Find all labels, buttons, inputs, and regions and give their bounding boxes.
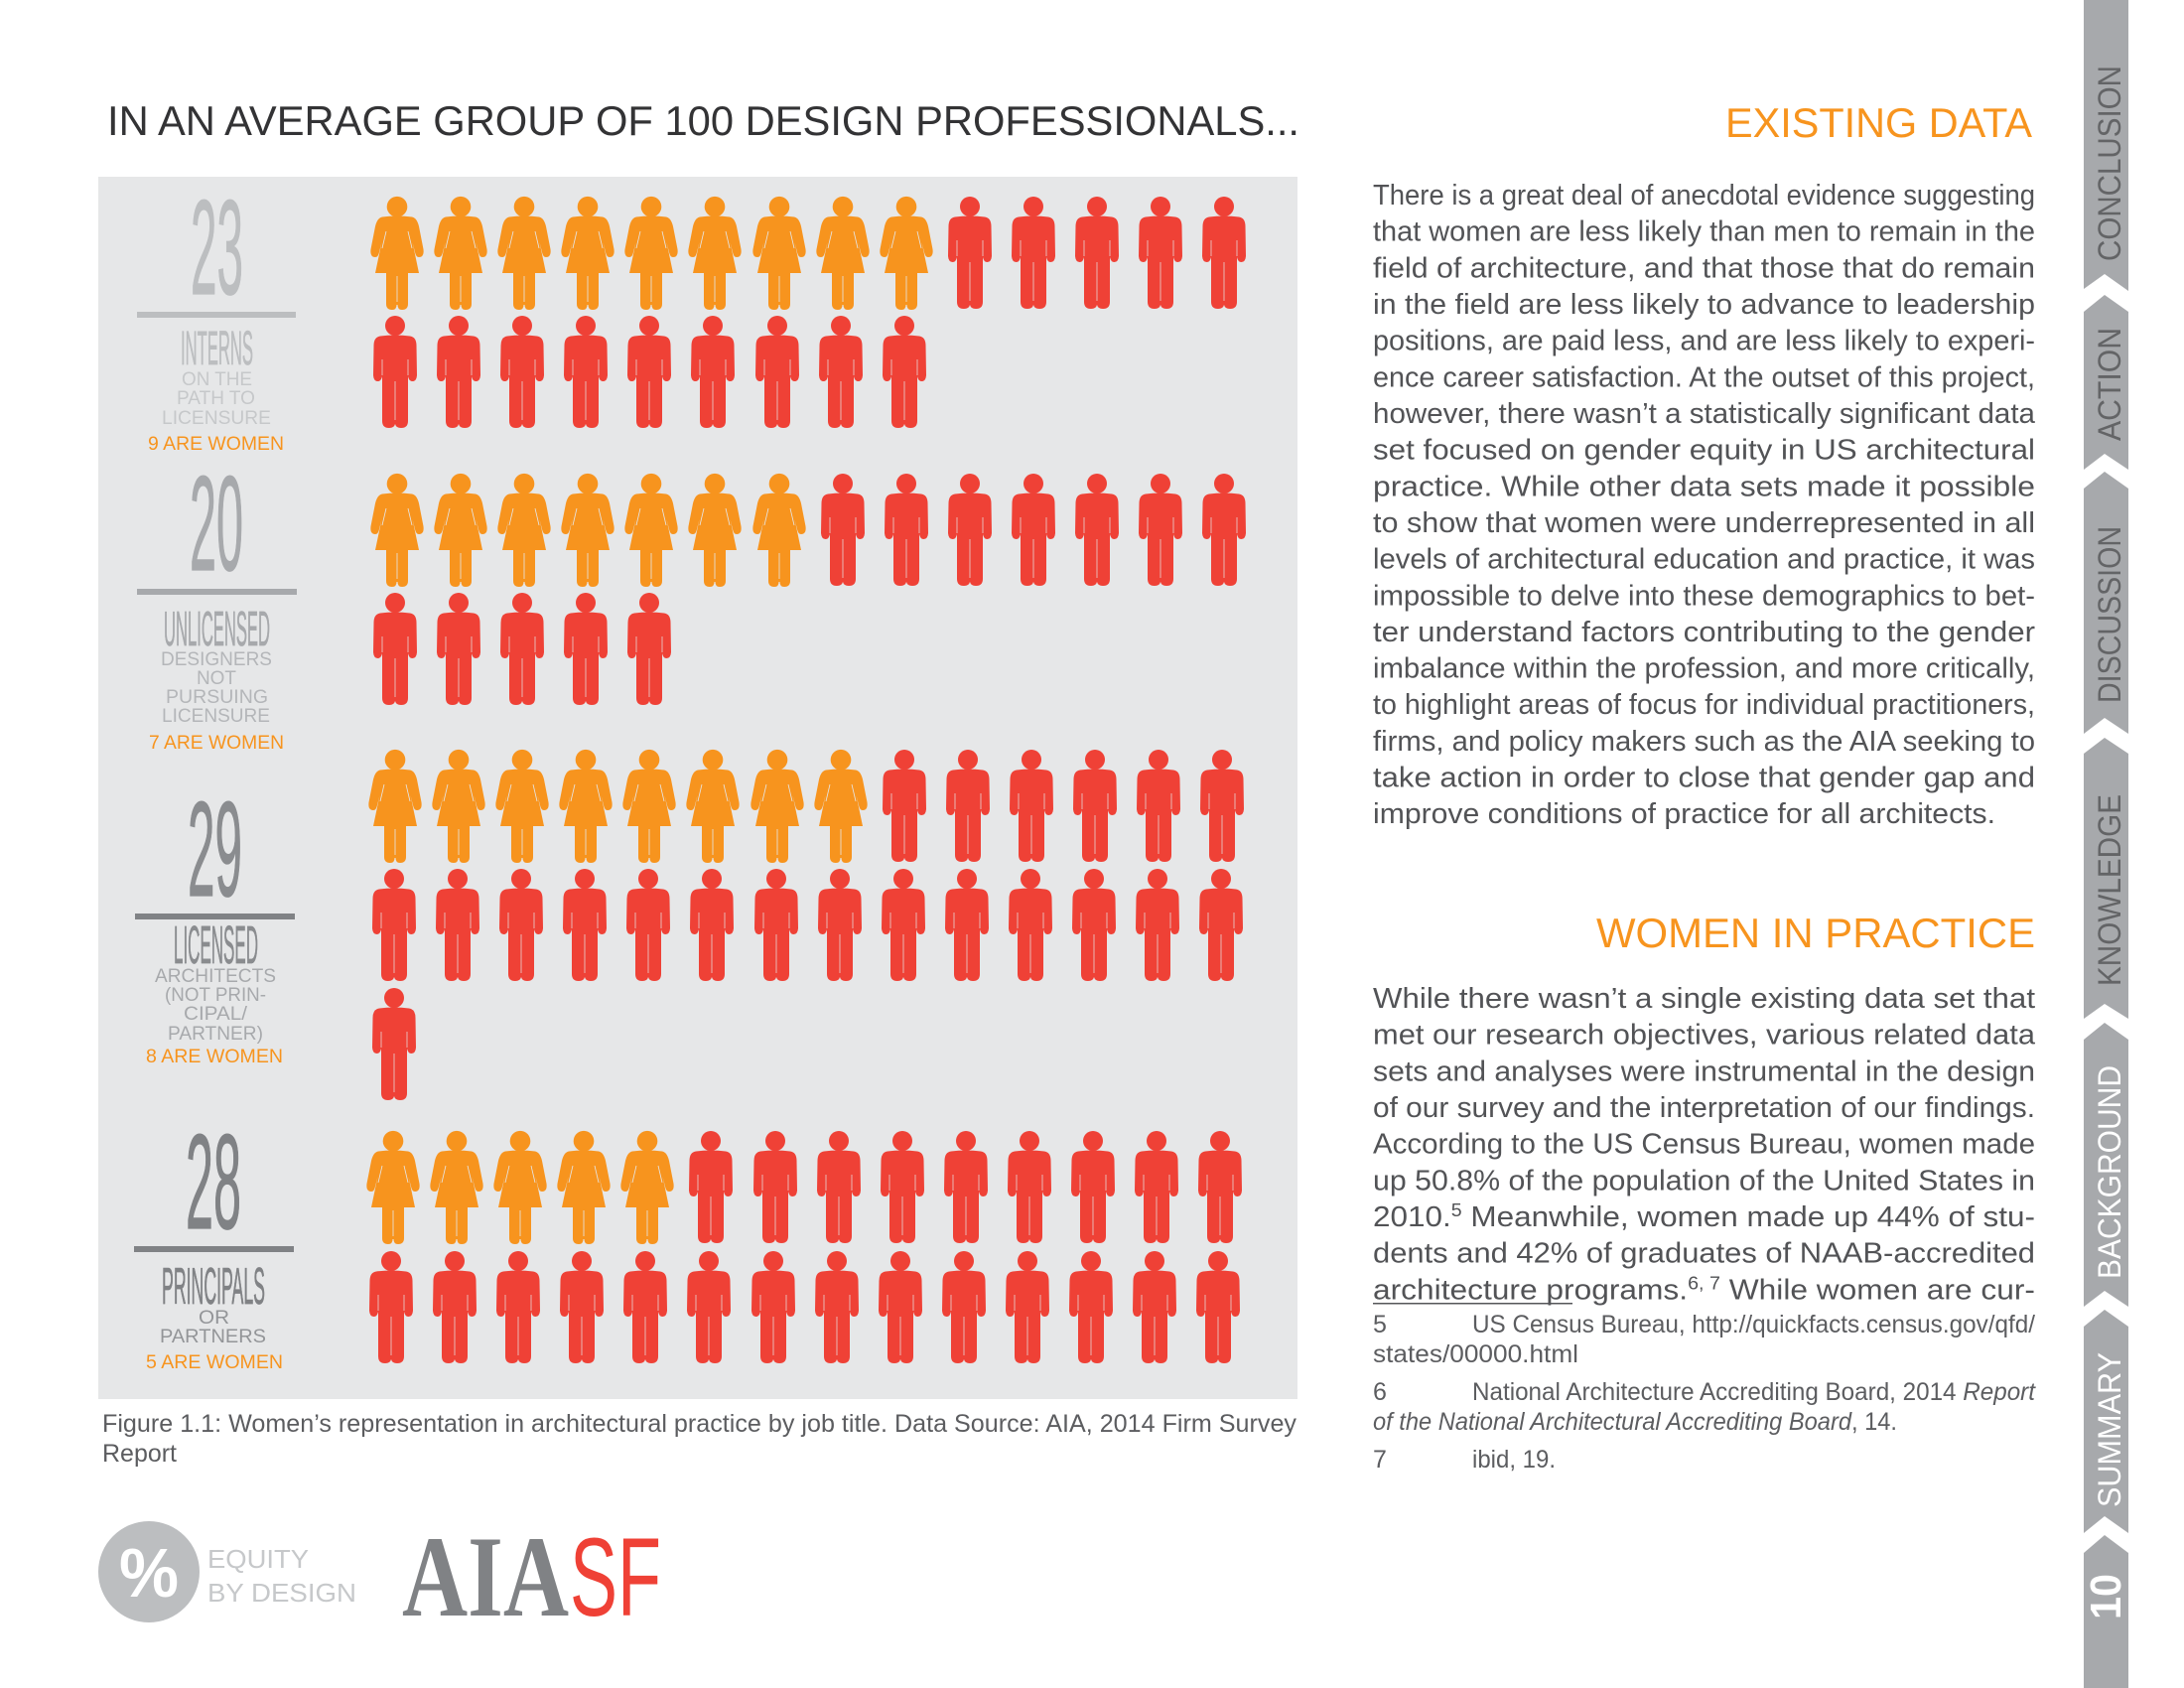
footnotes: states/00000.html [1373,1340,1578,1368]
footnotes: 7 [1373,1446,1387,1474]
footnotes: National Architecture Accrediting Board, 2014 Report [1472,1378,2036,1406]
text block: women in practice: 5 [1451,1200,1462,1220]
footnotes: of the National Architectural Accrediting Board, 14. [1373,1408,1897,1436]
interns label [148,323,284,455]
licensed label: PARTNER) [168,1024,263,1045]
text block: existing data: in the field are less likely to advance to leadership [1373,289,2035,321]
tab: discussion [2084,472,2128,734]
text block: women in practice [1373,983,2036,1306]
unlicensed label: PURSUING [166,687,268,708]
licensed label: (NOT PRIN- [165,985,266,1006]
text block: existing data: There is a great deal of anecdotal evidence suggesting [1373,180,2035,211]
text block: women in practice: 6, 7 [1688,1273,1720,1293]
logo: AIASF: SF [570,1515,661,1639]
text block: existing data: levels of architectural education and practice, it was [1373,544,2035,576]
unlicensed icons row 2 [373,593,671,705]
text block: existing data: however, there wasn’t a statistically significant data [1373,398,2036,430]
principals icons row 2 [369,1251,1240,1363]
unlicensed label: NOT [197,668,236,689]
text block: women in practice: 2010. [1373,1201,1445,1233]
text block: women in practice: According to the US Census Bureau, women made [1373,1129,2035,1161]
group: licensed [135,750,1244,1100]
group: principals: PRINCIPALS [162,1258,265,1316]
tab: background [2084,1023,2128,1307]
tab: knowledge: KNOWLEDGE [2092,794,2127,986]
unlicensed label: 7 ARE WOMEN [149,733,284,754]
footnotes: 5 [1373,1311,1387,1338]
principals label: 5 ARE WOMEN [146,1352,283,1373]
tab: summary: SUMMARY [2092,1352,2127,1507]
page number tab [2082,1535,2130,1688]
panel background [98,177,1297,1399]
licensed label [146,915,283,1067]
tab: summary [2084,1310,2128,1533]
footnote rule [1373,1303,1572,1305]
figure caption: Report [102,1440,177,1468]
figure caption [102,1410,1297,1468]
text block: women in practice: While there wasn’t a single existing data set that [1373,983,2035,1015]
text block: existing data: firms, and policy makers such as the AIA seeking to [1373,726,2035,758]
panel: pictogram chart [98,172,1297,1399]
text block: existing data: ter understand factors contributing to the gender [1373,617,2035,648]
text block: existing data: that women are less likely than men to remain in the [1373,216,2035,248]
licensed label: 8 ARE WOMEN [146,1047,283,1067]
unlicensed label: DESIGNERS [161,649,272,670]
text block: women in practice: sets and analyses were instrumental in the design [1373,1055,2035,1087]
footnotes: US Census Bureau, http://quickfacts.census.gov/qfd/ [1472,1311,2035,1338]
footnotes: 6 [1373,1378,1387,1406]
logo: equity by design: % [119,1534,179,1612]
interns label: PATH TO [177,388,255,409]
tab: discussion: DISCUSSION [2092,526,2127,703]
text block: existing data: practice. While other data sets made it possible [1373,471,2035,502]
logo: equity by design: EQUITY [207,1544,309,1574]
text block: existing data: ence career satisfaction. At the outset of this project, [1373,361,2035,393]
interns label: 9 ARE WOMEN [148,434,284,455]
logo: equity by design [98,1521,356,1622]
text block: existing data: take action in order to close that gender gap and [1373,763,2035,794]
footnotes: ibid, 19. [1472,1446,1556,1474]
interns icons row 2 [373,316,926,428]
text block: existing data: positions, are paid less, and are less likely to experi- [1373,326,2035,357]
group: licensed: LICENSED [174,915,258,975]
group: interns [137,172,1246,455]
text block: existing data: set focused on gender equity in US architectural [1373,435,2035,467]
text block: women in practice: dents and 42% of graduates of NAAB-accredited [1373,1238,2035,1270]
title: IN AN AVERAGE GROUP OF 100 DESIGN PROFESSIONALS... [107,97,1299,144]
licensed rule [135,914,295,919]
group: interns: INTERNS [181,323,253,375]
text block: existing data: impossible to delve into these demographics to bet- [1373,580,2035,612]
tab: action [2084,295,2128,470]
footnotes [1373,1311,2036,1474]
sidebar navigation [2082,0,2130,1688]
licensed label: CIPAL/ [184,1004,248,1025]
figure caption: Figure 1.1: Women’s representation in architectural practice by job title. Data Source: AIA, 2014 Firm Survey [102,1410,1297,1438]
text block: existing data: imbalance within the profession, and more critically, [1373,653,2035,685]
text block: existing data: to show that women were underrepresented in all [1373,507,2035,539]
group: principals: 28 [186,1106,241,1257]
text block: women in practice: met our research objectives, various related data [1373,1020,2036,1052]
page number tab: 10 [2082,1574,2130,1619]
text block: existing data: to highlight areas of focus for individual practitioners, [1373,689,2035,721]
group: principals [134,1106,1242,1373]
heading: women in practice: WOMEN IN PRACTICE [1596,910,2035,956]
interns label: ON THE [182,369,252,390]
text block: women in practice: up 50.8% of the population of the United States in [1373,1165,2035,1196]
principals label: OR [199,1308,229,1329]
text block: women in practice: While women are cur- [1720,1274,2035,1306]
group: unlicensed: UNLICENSED [164,603,270,656]
interns label: LICENSURE [162,408,271,429]
group: interns: 23 [191,172,243,323]
text block: existing data [1373,180,2036,830]
text block: women in practice: Meanwhile, women made up 44% of stu- [1462,1201,2035,1233]
tab: conclusion: CONCLUSION [2092,66,2127,261]
heading: existing data: EXISTING DATA [1725,99,2032,146]
licensed icons row 3 [372,988,416,1100]
tab: background: BACKGROUND [2092,1065,2127,1279]
interns rule [137,312,296,318]
tab: knowledge [2084,738,2128,1019]
principals rule [134,1246,294,1252]
interns icons row 1 [370,197,1246,310]
principals label: PARTNERS [160,1327,266,1347]
tab: conclusion [2084,0,2128,291]
logo: AIASF: AIA [402,1513,569,1641]
unlicensed label: LICENSURE [162,706,270,727]
principals label [146,1258,283,1373]
group: unlicensed: 20 [190,448,243,599]
tab: action: ACTION [2092,328,2127,441]
text block: women in practice: of our survey and the interpretation of our findings. [1373,1092,2035,1124]
unlicensed label [149,603,284,754]
unlicensed rule [137,589,297,595]
unlicensed icons row 1 [370,474,1246,587]
licensed icons row 2 [372,869,1243,981]
logo: equity by design: BY DESIGN [207,1578,356,1608]
text block: existing data: improve conditions of practice for all architects. [1373,798,1995,830]
principals icons row 1 [366,1131,1242,1244]
group: licensed: 29 [188,774,242,924]
group: unlicensed [137,448,1246,754]
licensed label: ARCHITECTS [155,966,276,987]
licensed icons row 1 [368,750,1244,863]
text block: women in practice: architecture programs. [1373,1274,1661,1306]
text block: existing data: field of architecture, and that those that do remain [1373,252,2035,284]
